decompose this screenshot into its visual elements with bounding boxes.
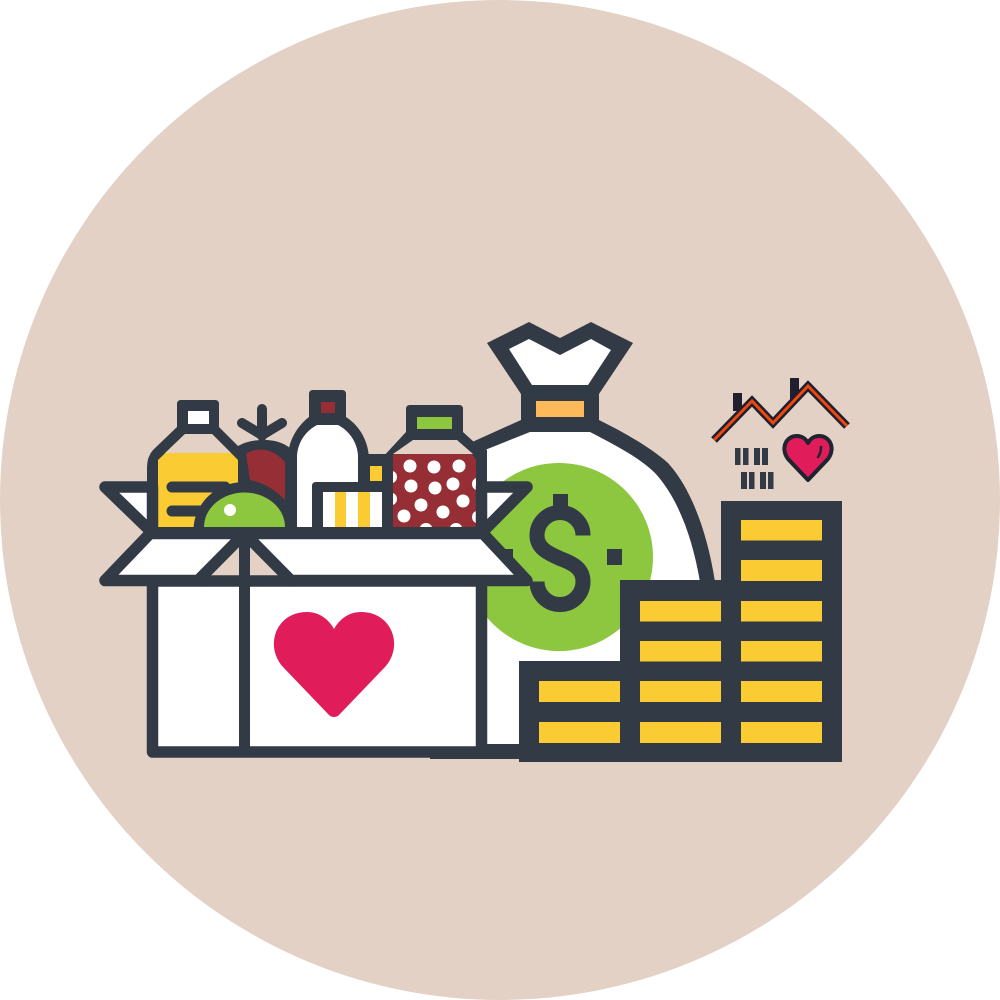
- icon: house with heart: [714, 378, 847, 489]
- green coin: [465, 463, 653, 651]
- bag neck band: [536, 401, 584, 417]
- windows: [735, 448, 774, 489]
- icon: beet vegetable: [238, 409, 292, 530]
- box heart: [274, 612, 394, 717]
- bottle label lines: [172, 487, 225, 511]
- bag body: [470, 420, 715, 740]
- box front right flap: [244, 534, 527, 580]
- bag tie top: [487, 322, 633, 425]
- dollar sign: [498, 494, 622, 604]
- icon: money bag: [465, 322, 715, 744]
- chimneys: [733, 393, 742, 411]
- icon: polka dot jar: [382, 405, 487, 530]
- box body: [152, 581, 482, 752]
- small heart: [784, 436, 832, 480]
- bag lower edge: [430, 744, 530, 759]
- icon: oil bottle: [147, 400, 245, 530]
- jar dots: [393, 460, 476, 527]
- roof: [714, 386, 847, 440]
- box front left flap: [105, 534, 244, 580]
- icon: coin stacks: [519, 501, 842, 762]
- box rear flaps: [105, 487, 152, 533]
- icon: striped carton: [312, 482, 393, 530]
- icon: small yellow box behind: [358, 454, 393, 530]
- icon: open donation box: [105, 487, 527, 752]
- icon: white bottle: [288, 390, 369, 530]
- icon: green fruit: [194, 482, 296, 530]
